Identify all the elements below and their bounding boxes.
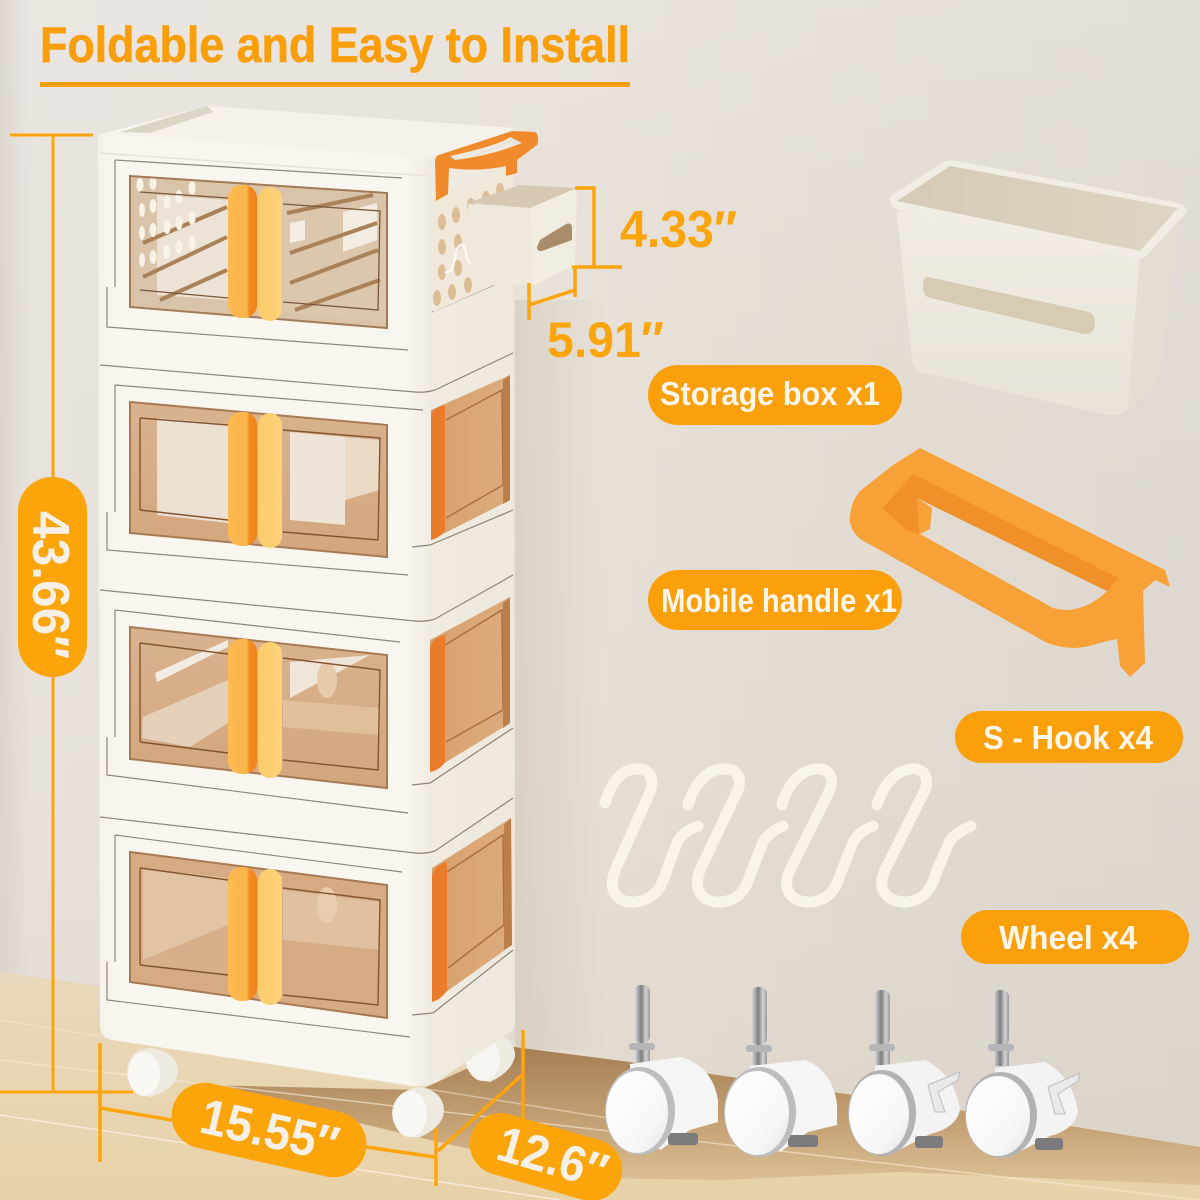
tier 3 window bbox=[130, 627, 387, 788]
label: wheel bbox=[961, 910, 1189, 964]
tier 4 window bbox=[130, 852, 387, 1018]
tier 4 door handles bbox=[228, 867, 282, 1005]
tower body bbox=[98, 106, 515, 1086]
dimension: width 15.55 inches: 15.55″ bbox=[195, 1088, 344, 1173]
dimension: overall height 43.66 inches: 43.66″ bbox=[21, 511, 79, 659]
tower back wheels bbox=[127, 1033, 515, 1097]
tier outlines bbox=[100, 160, 513, 1037]
tier 1 door handles bbox=[228, 185, 282, 321]
tier 3 side window bbox=[430, 597, 510, 772]
orange carry handle on lid bbox=[435, 131, 538, 201]
tier 1 perforated side panel bbox=[433, 170, 512, 312]
part: caster wheel 1 bbox=[605, 985, 718, 1155]
part: mobile handle bbox=[850, 448, 1170, 677]
dimension: storage box height 4.33 inches bbox=[572, 188, 737, 267]
tier 2 side window bbox=[431, 375, 510, 540]
tier 2 window bbox=[130, 402, 387, 557]
tier 1 small S-hook bbox=[445, 241, 480, 272]
dimension: width 15.55 inches bbox=[100, 1043, 436, 1186]
storage tower bbox=[98, 106, 538, 1138]
label: S-hook bbox=[955, 711, 1183, 763]
label: mobile handle bbox=[648, 570, 902, 630]
label: storage box: Storage box x1 bbox=[660, 375, 880, 412]
label: S-hook: S - Hook x4 bbox=[983, 719, 1154, 756]
label: wheel: Wheel x4 bbox=[999, 919, 1138, 956]
label: storage box bbox=[648, 365, 902, 425]
dimension: storage box width 5.91 inches bbox=[529, 267, 664, 368]
dimension: depth 12.6 inches: 12.6″ bbox=[491, 1115, 614, 1200]
dimension: storage box height 4.33 inches: 4.33″ bbox=[620, 201, 737, 259]
dimension: depth 12.6 inches bbox=[438, 1030, 630, 1200]
title: Foldable and Easy to Install bbox=[40, 17, 630, 73]
tower lid bbox=[100, 106, 513, 175]
tier 3 door handles bbox=[228, 639, 282, 778]
tier 4 side window bbox=[432, 818, 512, 1002]
label: mobile handle: Mobile handle x1 bbox=[661, 582, 897, 619]
part: caster wheel 2 bbox=[724, 987, 837, 1157]
hanging storage box on tower bbox=[468, 185, 577, 286]
dimension: overall height 43.66 inches bbox=[0, 135, 133, 1092]
tower front wheel bbox=[392, 1087, 444, 1138]
part: four S-hooks bbox=[605, 769, 971, 902]
part: caster wheel 3 with brake bbox=[848, 990, 960, 1156]
part: caster wheel 4 with brake bbox=[965, 990, 1080, 1158]
tier 2 door handles bbox=[228, 412, 282, 548]
tier 1 window bbox=[130, 176, 387, 328]
dimension: storage box width 5.91 inches: 5.91″ bbox=[547, 312, 664, 368]
part: storage box bbox=[890, 160, 1186, 415]
wooden floor bbox=[0, 972, 1200, 1200]
